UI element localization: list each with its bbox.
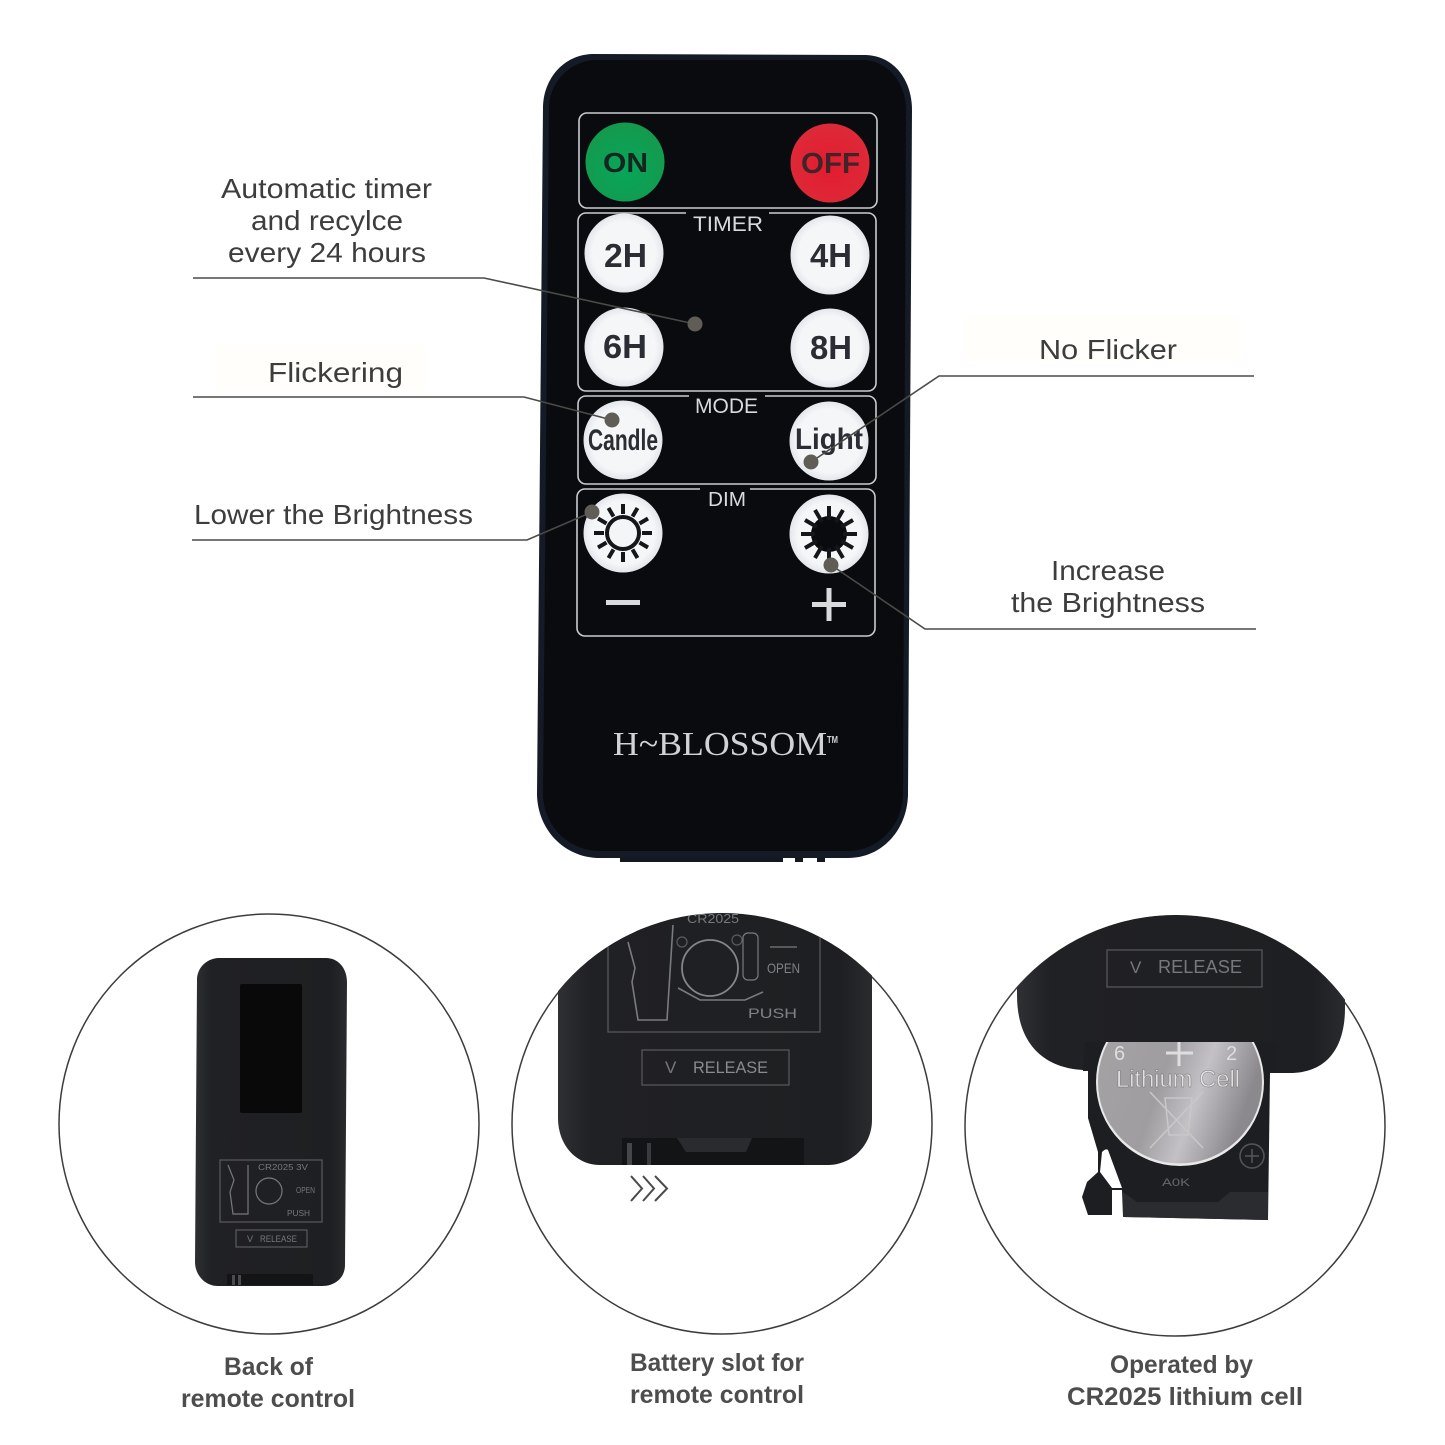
caption: battery slot bbox=[630, 1349, 804, 1409]
caption: battery slot: Battery slot for bbox=[630, 1349, 804, 1377]
coin cell: 2 bbox=[1226, 1043, 1237, 1065]
release label: V bbox=[1130, 958, 1142, 977]
circle outline bbox=[59, 914, 479, 1334]
off button: OFF bbox=[801, 148, 860, 180]
coin cell lower edge bbox=[1110, 1126, 1250, 1164]
4H button bbox=[790, 216, 870, 294]
caption: battery slot: remote control bbox=[630, 1381, 804, 1409]
panel: back of remote bbox=[59, 914, 479, 1334]
battery door bbox=[227, 1274, 313, 1285]
trademark: TM bbox=[827, 735, 838, 746]
release label: RELEASE bbox=[1158, 957, 1242, 977]
light button bbox=[790, 402, 868, 480]
embossed battery diagram: CR2025 3V bbox=[258, 1163, 309, 1172]
callout: no flicker bbox=[804, 334, 1254, 470]
remote close-up body: CR2025 bbox=[687, 911, 739, 926]
on button bbox=[586, 122, 664, 202]
plus sign bbox=[812, 588, 846, 621]
2H button bbox=[584, 214, 664, 292]
coin cell bbox=[1096, 1042, 1264, 1166]
embossed battery diagram bbox=[220, 1160, 322, 1222]
remote control front bbox=[537, 54, 912, 862]
icon: chevrons bbox=[631, 1176, 667, 1201]
on button: ON bbox=[603, 147, 648, 178]
caption: back of remote: remote control bbox=[181, 1385, 355, 1413]
callout: flickering: Flickering bbox=[268, 357, 403, 388]
callout: automatic timer: and recylce bbox=[251, 205, 403, 236]
minus sign bbox=[606, 600, 640, 605]
panel: lithium cell bbox=[965, 900, 1385, 1336]
panel: battery slot bbox=[512, 900, 932, 1334]
release label bbox=[642, 1050, 789, 1085]
candle button bbox=[584, 400, 662, 480]
callout: automatic timer bbox=[193, 173, 702, 332]
callout: increase the brightness: the Brightness bbox=[1011, 587, 1205, 618]
remote close-up body: PUSH bbox=[748, 1005, 797, 1021]
timer section bbox=[578, 210, 876, 391]
caption: back of remote bbox=[181, 1353, 355, 1413]
callout: lower the brightness bbox=[192, 499, 600, 540]
callout: increase the brightness: Increase bbox=[1051, 555, 1165, 586]
4H button: 4H bbox=[810, 237, 852, 274]
release label: RELEASE bbox=[260, 1234, 297, 1244]
candle button: Candle bbox=[588, 424, 658, 457]
caption: lithium cell: CR2025 lithium cell bbox=[1067, 1383, 1303, 1411]
release label: RELEASE bbox=[693, 1058, 768, 1077]
embossed battery diagram: PUSH bbox=[287, 1209, 310, 1218]
tray lower band bbox=[1123, 1192, 1268, 1220]
release label bbox=[1107, 950, 1262, 987]
callout: no flicker: No Flicker bbox=[1039, 334, 1177, 365]
mode section: MODE bbox=[695, 395, 758, 418]
release label: V bbox=[247, 1234, 253, 1244]
release label: V bbox=[665, 1058, 677, 1077]
callout: increase the brightness bbox=[824, 555, 1256, 629]
cap bbox=[1017, 900, 1345, 1073]
2H button: 2H bbox=[604, 237, 647, 274]
brand logo: H~BLOSSOM bbox=[613, 726, 827, 763]
screw bbox=[1240, 1144, 1264, 1168]
power section bbox=[579, 113, 877, 208]
caption: lithium cell bbox=[1067, 1351, 1303, 1411]
tray marking: A0K bbox=[1162, 1177, 1191, 1189]
release label bbox=[236, 1230, 307, 1247]
coin cell: 6 bbox=[1114, 1043, 1125, 1065]
tray notch bbox=[1100, 1149, 1122, 1188]
dim section bbox=[577, 486, 875, 636]
8H button: 8H bbox=[810, 329, 852, 366]
timer section: TIMER bbox=[693, 213, 763, 236]
battery tray bbox=[1082, 1042, 1278, 1220]
8H button bbox=[790, 308, 870, 388]
callout: automatic timer: every 24 hours bbox=[228, 237, 426, 268]
remote close-up body bbox=[558, 900, 872, 1165]
mode section bbox=[578, 394, 876, 484]
caption: back of remote: Back of bbox=[224, 1353, 314, 1381]
dim section: DIM bbox=[708, 489, 746, 511]
caption: lithium cell: Operated by bbox=[1110, 1351, 1253, 1379]
battery door bbox=[622, 1138, 804, 1165]
dark window bbox=[240, 984, 302, 1113]
remote body bbox=[537, 54, 912, 858]
6H button bbox=[584, 308, 664, 386]
icon: dim up sun bbox=[790, 494, 868, 574]
callout: automatic timer: Automatic timer bbox=[221, 173, 432, 204]
remote close-up body: OPEN bbox=[767, 960, 800, 976]
off button bbox=[790, 124, 870, 202]
remote back body bbox=[195, 958, 347, 1286]
circle outline bbox=[512, 914, 932, 1334]
light button: Light bbox=[795, 423, 863, 456]
embossed battery diagram: OPEN bbox=[296, 1186, 315, 1195]
6H button: 6H bbox=[603, 328, 647, 365]
circle outline bbox=[965, 916, 1385, 1336]
callout: flickering bbox=[193, 357, 620, 428]
coin cell: Lithium Cell bbox=[1116, 1066, 1240, 1093]
callout: lower the brightness: Lower the Brightness bbox=[194, 499, 473, 530]
icon: dim down sun bbox=[584, 494, 662, 572]
